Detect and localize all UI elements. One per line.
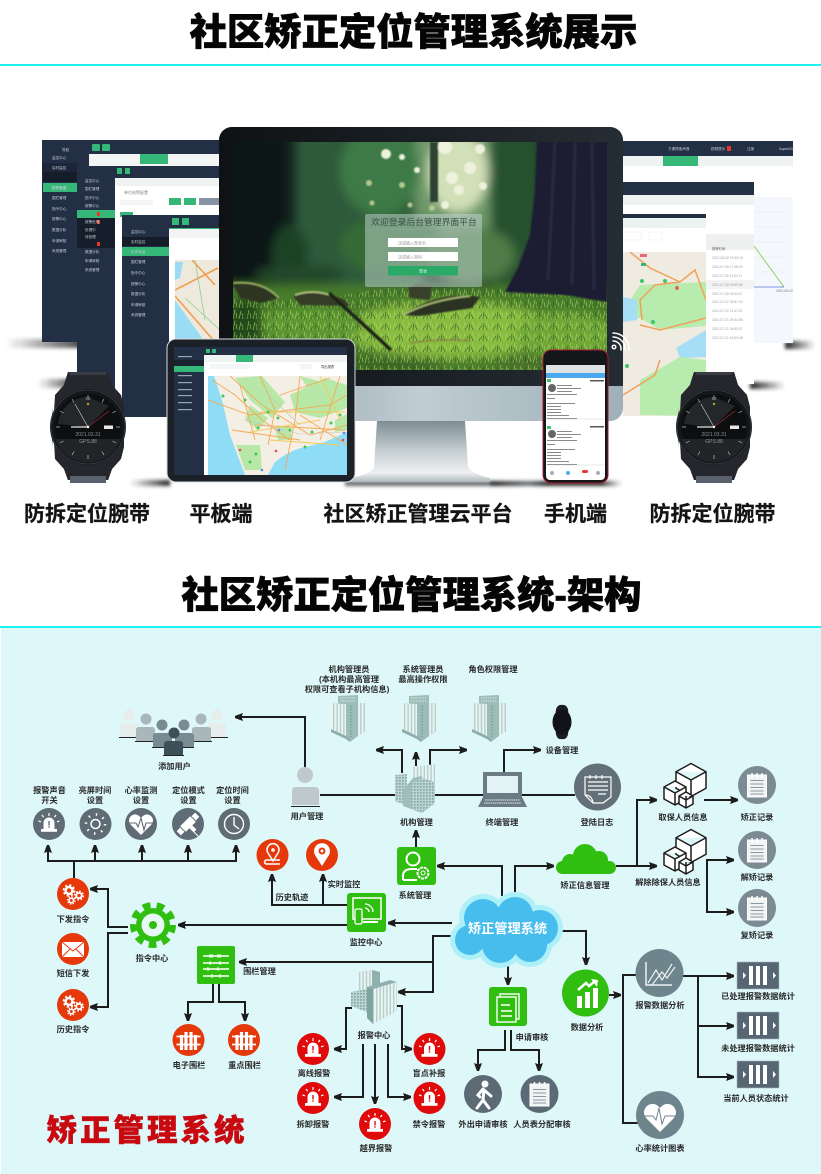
back-right admin screens: 2021-07-22 14:17:21 <box>712 309 743 313</box>
node: 系统管理: 系统管理 <box>399 890 431 900</box>
node: 数据分析: 数据分析 <box>571 1022 603 1032</box>
node: 亮屏时间设置: 亮屏时间 <box>79 785 111 795</box>
back-right admin screens: 2021-07-28 09:24:27 <box>712 292 743 296</box>
node: 机构管理员: (本机构最高管理 <box>319 674 379 684</box>
node: 短信下发: 短信下发 <box>57 968 90 978</box>
back-right admin screens: 报警时间 <box>712 246 725 251</box>
node: 心率监测设置: 设置 <box>133 795 149 805</box>
back-left admin screen 2: 申请审核 <box>85 258 100 263</box>
node: 重点围栏: 重点围栏 <box>228 1060 261 1070</box>
back-left admin screen 3: 系统管理 <box>131 312 146 317</box>
back-left admin screen 3: 围栏管理 <box>131 259 146 264</box>
device captions <box>24 502 776 526</box>
back-right admin screens: 2021-07-30 11:51:11 <box>712 274 742 278</box>
node: 人员表分配审核: 人员表分配审核 <box>513 1119 571 1129</box>
node: 设备管理 <box>546 705 578 755</box>
login wallpaper <box>233 142 607 370</box>
grass blades <box>233 285 607 370</box>
node: 角色权限管理 <box>468 664 518 742</box>
node: 报警数据分析: 报警数据分析 <box>635 1000 685 1010</box>
back-left admin screen 2: 数据分析 <box>85 249 100 254</box>
back-left admin screen 3: 实时监控 <box>131 239 146 244</box>
device captions: 平板端 <box>190 503 252 526</box>
node: 报警声音开关: 报警声音 <box>33 785 66 795</box>
node: 拆卸报警 <box>297 1082 329 1129</box>
back-left admin screen 1: 导航 <box>62 147 70 152</box>
node: 短信下发 <box>57 933 90 978</box>
back-left admin screen 1: 围栏管理 <box>52 195 67 200</box>
node: 围栏管理 <box>197 946 276 984</box>
node: 定位时间设置: 定位时间 <box>216 785 249 795</box>
node: 下发指令: 下发指令 <box>57 914 90 924</box>
section title: architecture: 社区矫正定位管理系统-架构 <box>182 574 641 616</box>
node: 亮屏时间设置 <box>79 785 112 840</box>
back-left admin screen 1: 申请审核 <box>52 238 67 243</box>
node: 机构管理: 机构管理 <box>400 817 433 827</box>
node: 矫正管理系统 cloud <box>450 892 563 968</box>
node: 报警声音开关: 开关 <box>41 795 58 805</box>
node: 重点围栏 <box>228 1024 261 1070</box>
node: 外出申请审核 <box>458 1075 508 1129</box>
node: 盲点补报 <box>413 1033 446 1078</box>
back-left admin screen 3 <box>122 215 222 418</box>
tablet <box>167 339 355 482</box>
back-left admin screen 2: 报警处理 <box>85 219 100 224</box>
back-left admin screen 1: 报警中心 <box>52 216 67 221</box>
back-right admin screens <box>623 141 794 416</box>
back-right admin screens: 2021-07-27 06:37:20 <box>712 300 743 304</box>
right map <box>623 252 706 416</box>
node: 禁令报警: 禁令报警 <box>413 1119 445 1129</box>
back-left admin screen 2: 处理中 <box>85 227 96 232</box>
node: 设备管理: 设备管理 <box>546 745 578 755</box>
back-right admin screens: 2021-07-21 06:50:57 <box>712 327 743 331</box>
red system label: 矫正管理系统 <box>46 1113 248 1148</box>
back-right admin screens: 注册 <box>747 146 755 151</box>
device captions: 社区矫正管理云平台 <box>324 502 512 526</box>
node: 机构管理员: 权限可查看子机构信息) <box>305 684 390 694</box>
node: 监控中心: 监控中心 <box>350 937 383 947</box>
node: 已处理报警数据统计 <box>721 962 795 1001</box>
node: 实时监控: 实时监控 <box>328 879 360 889</box>
node: 登陆日志 <box>574 764 621 827</box>
back-left admin screen 1: 历史轨迹 <box>52 185 67 190</box>
back-right admin screens: liuyao002 <box>779 147 794 151</box>
back-right admin screens: 方便搜索声音 <box>668 146 690 151</box>
node: 未处理报警数据统计 <box>721 1012 795 1053</box>
back-right admin screens: 2021-08-02 <box>776 289 793 293</box>
node: 矫正记录: 矫正记录 <box>741 812 773 822</box>
node: 已处理报警数据统计: 已处理报警数据统计 <box>721 991 795 1001</box>
back-left admin screen 2: 待处理 <box>85 234 96 239</box>
node: 越界报警: 越界报警 <box>360 1143 392 1153</box>
back-left admin screen 2 <box>77 167 222 418</box>
back-left admin screen 1: 指令中心 <box>52 206 67 211</box>
node: 机构管理员 <box>305 664 390 742</box>
node: 报警数据分析 <box>635 949 685 1010</box>
login panel: 登录 <box>419 268 427 274</box>
back-right admin screens: 2021-07-28 09:59:58 <box>712 283 743 287</box>
node: 矫正管理系统 cloud: 矫正管理系统 <box>468 920 547 936</box>
node: 定位模式设置 <box>172 785 205 840</box>
node: 解除除保人员信息: 解除除保人员信息 <box>635 877 701 887</box>
node: 盲点补报: 盲点补报 <box>413 1068 445 1078</box>
node: 解矫记录 <box>738 831 776 882</box>
node: 报警中心: 报警中心 <box>358 1030 391 1040</box>
node: 定位模式设置: 定位模式 <box>172 785 205 795</box>
node: 心率统计图表 <box>635 1091 685 1153</box>
panel: architecture diagram <box>1 628 821 1174</box>
node: 实时监控 <box>306 839 360 889</box>
node: 添加用户 <box>119 710 228 771</box>
node: 指令中心: 指令中心 <box>136 953 169 963</box>
node: 定位时间设置 <box>216 785 250 840</box>
node: 指令中心 <box>134 906 172 963</box>
node: 当前人员状态统计: 当前人员状态统计 <box>723 1093 789 1103</box>
node: 机构管理 <box>395 764 435 827</box>
node: 离线报警 <box>297 1033 330 1078</box>
login panel <box>365 214 482 287</box>
node: 越界报警 <box>359 1108 392 1153</box>
node: 系统管理员: 系统管理员 <box>403 664 443 674</box>
node: 矫正信息管理: 矫正信息管理 <box>560 880 610 890</box>
node: 复矫记录 <box>738 889 776 940</box>
back-left admin screen 2: 系统管理 <box>85 267 100 272</box>
node: 矫正记录 <box>738 766 776 822</box>
node: 定位模式设置: 设置 <box>180 795 197 805</box>
back-left admin screen 2: 监控中心 <box>85 178 100 183</box>
node: 取保人员信息 <box>658 764 708 822</box>
node: 电子围栏: 电子围栏 <box>173 1060 205 1070</box>
back-left admin screen 3: 历史轨迹 <box>131 249 146 254</box>
device captions: 防拆定位腕带 <box>650 502 776 526</box>
back-left admin screen 3: 申请审核 <box>131 302 146 307</box>
node: 添加用户: 添加用户 <box>158 761 191 771</box>
back-right admin screens: 2021-07-21 16:23:48 <box>712 336 743 340</box>
node: 心率监测设置 <box>125 785 157 840</box>
back-left admin screen 1: 数据分析 <box>52 227 67 232</box>
back-left admin screen 2: 单位结警配置 <box>124 189 148 195</box>
node: 矫正信息管理 <box>556 844 616 890</box>
node: 围栏管理: 围栏管理 <box>243 966 276 976</box>
hero: device showcase <box>6 125 815 526</box>
tree trunk <box>505 142 607 302</box>
node: 历史轨迹: 历史轨迹 <box>276 892 308 902</box>
connector arrows <box>48 717 738 1123</box>
tablet: 导出报表 <box>321 364 335 369</box>
back-left admin screen 1: 监控中心 <box>52 155 67 160</box>
node: 角色权限管理: 角色权限管理 <box>468 664 518 674</box>
monitor <box>219 125 623 482</box>
node: 系统管理员: 最高操作权限 <box>398 674 448 684</box>
login panel: 送请输入登录名 <box>398 240 426 246</box>
back-left admin screen 3: 数据分析 <box>131 291 146 296</box>
monitor stand <box>350 421 490 482</box>
node: 监控中心 <box>347 893 386 947</box>
node: 数据分析 <box>562 970 609 1032</box>
right watch <box>676 372 752 483</box>
node: 复矫记录: 复矫记录 <box>741 930 773 940</box>
back-right admin screens: 2021-08-02 15:35:19 <box>712 256 743 260</box>
node: 申请审核 <box>489 987 548 1042</box>
node: 系统管理员 <box>398 664 448 742</box>
node: 解除除保人员信息 <box>635 830 706 887</box>
node: 未处理报警数据统计: 未处理报警数据统计 <box>721 1043 795 1053</box>
device captions: 手机端 <box>544 503 607 526</box>
page title: 社区矫正定位管理系统展示 <box>190 11 637 53</box>
node: 电子围栏 <box>172 1024 205 1070</box>
node: 解矫记录: 解矫记录 <box>741 872 773 882</box>
back-left admin screen 3: 报警中心 <box>131 281 146 286</box>
node: 心率统计图表: 心率统计图表 <box>635 1143 685 1153</box>
left watch <box>50 372 126 483</box>
small map <box>175 260 220 342</box>
node: 报警中心 <box>351 970 397 1040</box>
node: 外出申请审核: 外出申请审核 <box>458 1119 508 1129</box>
node: 用户管理: 用户管理 <box>291 811 323 821</box>
login panel: 送请输入密码 <box>398 254 422 260</box>
back-left admin screen 3: 指令中心 <box>131 270 146 275</box>
back-left admin screen 1 <box>42 140 222 342</box>
node: 终端管理: 终端管理 <box>486 817 518 827</box>
device captions: 防拆定位腕带 <box>24 502 150 526</box>
node: 机构管理员: 机构管理员 <box>329 664 369 674</box>
back-right admin screens: 税税提示 <box>711 146 726 151</box>
node: 心率监测设置: 心率监测 <box>125 785 157 795</box>
node: 报警声音开关 <box>33 785 66 840</box>
back-left admin screen 1: 历史轨迹 <box>52 185 67 190</box>
ground shadows <box>6 339 815 486</box>
back-right admin screens: 2021-07-21 09:44:56 <box>712 318 743 322</box>
node: 登陆日志: 登陆日志 <box>581 817 613 827</box>
node: 取保人员信息: 取保人员信息 <box>658 812 708 822</box>
phone <box>543 350 608 483</box>
node: 申请审核: 申请审核 <box>516 1032 548 1042</box>
node: 禁令报警 <box>413 1082 446 1129</box>
node: 拆卸报警: 拆卸报警 <box>297 1119 329 1129</box>
back-left admin screen 2: 指令中心 <box>85 195 100 200</box>
icon: wireless signal <box>612 333 629 350</box>
back-left admin screen 2: 围栏管理 <box>85 186 100 191</box>
node: 历史轨迹 <box>256 839 308 902</box>
node: 用户管理 <box>291 767 323 821</box>
node: 离线报警: 离线报警 <box>298 1068 330 1078</box>
node: 下发指令 <box>57 878 90 924</box>
back-left admin screen 1: 系统管理 <box>52 248 67 253</box>
node: 历史指令: 历史指令 <box>57 1024 90 1034</box>
icon: user group <box>119 710 228 756</box>
node: 系统管理 <box>397 847 436 900</box>
node: 人员表分配审核 <box>513 1075 571 1129</box>
back-left admin screen 1: 实时监控 <box>52 165 67 170</box>
node: 历史指令 <box>57 989 90 1034</box>
login panel: 欢迎登录后台管理界面平台 <box>371 216 477 227</box>
node: 亮屏时间设置: 设置 <box>87 795 103 805</box>
back-left admin screen 3: 监控中心 <box>131 229 146 234</box>
node: 终端管理 <box>478 772 527 827</box>
moss logs <box>233 283 278 303</box>
node: 定位时间设置: 设置 <box>224 795 241 805</box>
back-right admin screens: 2021-07-30 17:38:23 <box>712 265 743 269</box>
back-left admin screen 2: 报警中心 <box>85 203 100 208</box>
tablet map <box>208 376 347 475</box>
node: 当前人员状态统计 <box>723 1061 789 1103</box>
